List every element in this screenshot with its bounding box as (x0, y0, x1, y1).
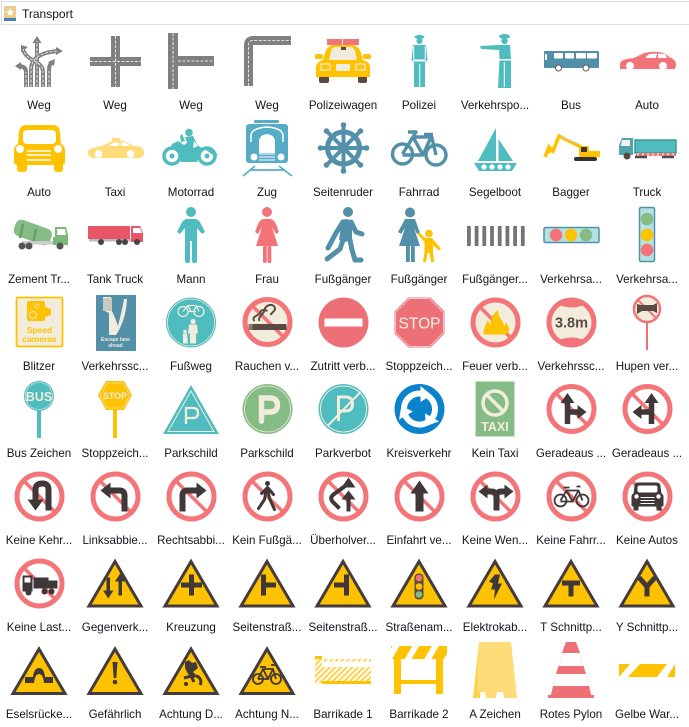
cell: Fußgängerüberweg (462, 226, 528, 286)
label: Fußgänger (315, 273, 371, 286)
label: Polizei (402, 99, 436, 112)
icon: no left or right (473, 474, 518, 519)
label: Stoppzeich... (81, 447, 149, 460)
label: Eselsrücke... (6, 708, 72, 721)
cell: Überholverbot (310, 474, 376, 547)
icon: yellow car (14, 125, 65, 172)
icon: parking circle (242, 384, 292, 434)
label: Barrikade 2 (389, 708, 449, 721)
label: Keine Last... (7, 621, 71, 634)
cell: Einfahrt verboten (386, 474, 452, 547)
icon: bicycle warning (241, 649, 293, 694)
label: Keine Wen... (462, 534, 528, 547)
cell: Seitenruder (313, 122, 373, 199)
icon: traffic light warning (393, 562, 445, 606)
icon: red traffic cone (548, 642, 594, 698)
label: Auto (27, 186, 51, 199)
label: Keine Fahrr... (536, 534, 606, 547)
cell: Fahrrad (392, 132, 446, 199)
cell: Kein Fußgänger (232, 474, 302, 547)
label: Parkschild (240, 447, 294, 460)
cell: Frau (255, 207, 279, 286)
cell: Fußgänger 2 (391, 208, 447, 286)
icon: no bicycles (549, 474, 594, 519)
icon: escape lane sign: ahead (108, 343, 123, 349)
label: Bus Zeichen (7, 447, 71, 460)
icon: taxi (88, 138, 144, 158)
label: Verkehrspo... (461, 99, 529, 112)
label: Achtung D... (159, 708, 223, 721)
cell: Elektrokabel (463, 562, 527, 634)
label: Hupen ver... (616, 360, 678, 373)
icon: no pedestrians (245, 474, 290, 519)
icon: horizontal traffic light (544, 228, 599, 242)
cell: T Schnittpunkt (540, 562, 602, 634)
label: Achtung N... (235, 708, 299, 721)
icon: vertical traffic light (640, 208, 654, 262)
icon: crosswalk (467, 226, 525, 246)
cell: Bagger (543, 136, 600, 199)
cell: Barrikade 1 (313, 656, 373, 721)
label: Zutritt verb... (310, 360, 376, 373)
label: Stoppzeich... (385, 360, 453, 373)
cell: Keine Autos (616, 474, 678, 547)
icon: road junction (15, 36, 63, 87)
icon: roundabout (394, 384, 447, 434)
label: Seitenstraß... (309, 621, 377, 634)
icon: stop sign: STOP (399, 316, 440, 332)
icon: red car (620, 52, 676, 70)
cell: Gegenverkehr (82, 562, 148, 634)
icon: speed bump warning (13, 649, 65, 694)
label: Rauchen v... (235, 360, 299, 373)
cell: Truck (619, 138, 676, 199)
icon: stencil (4, 6, 16, 21)
label: Auto (635, 99, 659, 112)
cell: Polizeiwagen (309, 39, 377, 112)
cell: Keine Wende (462, 474, 528, 547)
label: Kein Fußgä... (232, 534, 302, 547)
icon: escape lane sign (96, 295, 136, 351)
icon: road corner (248, 40, 291, 86)
icon: no right turn (169, 474, 214, 519)
cell: Verkehrspolizei (461, 34, 529, 112)
icon: tank truck (88, 226, 143, 245)
cell: Mann (176, 207, 206, 286)
label: Motorrad (168, 186, 214, 199)
cell: Stoppzeichen gelb (81, 381, 149, 460)
icon: T junction warning (545, 562, 597, 606)
icon: side road left warning (317, 562, 369, 606)
icon: excavator (543, 136, 600, 161)
icon: no straight (397, 474, 442, 519)
label: Straßenam... (385, 621, 453, 634)
icon: man (177, 207, 205, 263)
cell: Achtung Nicht-Kraftfahrzeuge (235, 649, 299, 721)
cell: Blitzer (16, 298, 62, 373)
label: Weg (27, 99, 51, 112)
icon: truck (619, 138, 676, 160)
label: Kreisverkehr (386, 447, 452, 460)
cell: Geradeaus links (612, 386, 682, 460)
icon: cement truck (12, 218, 68, 250)
label: Parkverbot (315, 447, 372, 460)
cell: Keine Fahrräder (536, 474, 606, 547)
label: Elektrokab... (463, 621, 527, 634)
icon: ship wheel (318, 122, 369, 174)
icon: no cars (625, 474, 670, 519)
label: Bagger (552, 186, 590, 199)
icon: bus stop sign: BUS (26, 390, 52, 404)
cell: Keine Kehrtwende (6, 474, 72, 547)
icon: no straight or right (549, 386, 594, 432)
icon: sailboat (474, 128, 517, 171)
label: Blitzer (23, 360, 55, 373)
cell: Eselsrücken (6, 649, 72, 721)
icon: police officer (412, 35, 428, 87)
cell: Verkehrsschild 3.8m (537, 298, 605, 373)
cell: Zutritt verboten (310, 298, 376, 373)
cell: Parkverbot (315, 384, 372, 460)
label: Zug (257, 186, 277, 199)
icon: bicycle (392, 132, 446, 165)
cell: Stoppzeichen (385, 298, 453, 373)
label: Geradeaus ... (536, 447, 606, 460)
cell: Auto rot (620, 52, 676, 112)
label: Fußweg (170, 360, 212, 373)
icon: motorcycle (164, 129, 218, 164)
label: Kreuzung (166, 621, 216, 634)
label: Polizeiwagen (309, 99, 377, 112)
icon: parking triangle (163, 385, 219, 434)
label: Weg (255, 99, 279, 112)
cell: Rauchen verboten (235, 300, 299, 373)
label: T Schnittp... (540, 621, 602, 634)
cell: Bus Zeichen (7, 381, 71, 460)
icon: speed camera sign: cameras (22, 334, 57, 344)
cell: Auto gelb (14, 125, 65, 199)
icon: Y junction warning (621, 562, 673, 606)
label: Verkehrsa... (616, 273, 678, 286)
label: Barrikade 1 (313, 708, 373, 721)
icon: speed camera sign: Speed (27, 325, 52, 335)
icon: no smoking (245, 300, 290, 344)
icon: crossroads warning (165, 562, 217, 606)
icon: speed camera sign (16, 298, 62, 346)
label: Keine Autos (616, 534, 678, 547)
icon: machinery warning (165, 649, 217, 694)
cell: Weg 1 (15, 36, 63, 112)
label: Taxi (105, 186, 125, 199)
label: Mann (176, 273, 206, 286)
label: Y Schnittp... (616, 621, 678, 634)
label: Geradeaus ... (612, 447, 682, 460)
icon: traffic police (480, 34, 511, 88)
cell: Polizei (402, 35, 436, 112)
cell: Verkehrsschild (81, 295, 149, 373)
cell: Verkehrsampel vertikal (616, 208, 678, 286)
label: Bus (561, 99, 581, 112)
icon: escape lane sign: Escape lane (101, 337, 130, 343)
icon: woman (255, 207, 279, 263)
cell: Rechtsabbiegen (157, 474, 225, 547)
cell: Rotes Pylon (540, 642, 602, 721)
icon: barricade one (315, 656, 371, 684)
icon: T road (168, 33, 214, 89)
cell: Gefährlich (89, 649, 141, 721)
icon: danger warning (89, 649, 141, 694)
label: Rechtsabbi... (157, 534, 225, 547)
label: Überholver... (310, 534, 376, 547)
cell: Straßenampel (385, 562, 453, 634)
label: Frau (255, 273, 279, 286)
label: Segelboot (469, 186, 522, 199)
cell: Motorrad (164, 129, 218, 199)
icon: no entry (318, 298, 368, 348)
label: Verkehrsa... (540, 273, 602, 286)
label: Gegenverk... (82, 621, 148, 634)
icon: no left turn (93, 474, 138, 519)
icon: no u-turn (17, 474, 62, 519)
icon: A-frame sign (473, 642, 517, 698)
cell: Kein Taxi (472, 382, 518, 460)
icon: police car (315, 39, 371, 83)
cell: Tank Truck (87, 226, 143, 286)
label: Parkschild (164, 447, 218, 460)
icon: yellow warning strip (619, 664, 675, 677)
label: Fußgänger... (462, 273, 528, 286)
cell: Y Schnittpunkt (616, 562, 678, 634)
cell: Zug (243, 120, 292, 199)
icon: bus (544, 51, 599, 71)
cell: Fußweg (166, 298, 216, 373)
label: Feuer verb... (462, 360, 528, 373)
icon: footpath sign (166, 298, 216, 348)
icon: no straight or left (625, 386, 670, 432)
cell: Weg 3 (168, 33, 214, 112)
label: Verkehrssc... (537, 360, 605, 373)
icon: crossroad (90, 36, 141, 87)
icon: two-way traffic warning (89, 562, 141, 606)
cell: Kreisverkehr (386, 384, 452, 460)
heading: Transport (22, 7, 74, 21)
cell: Verkehrsampel horizontal (540, 228, 602, 286)
cell: Parkschild Dreieck (163, 385, 219, 460)
cell: Segelboot (469, 128, 522, 199)
label: Weg (179, 99, 203, 112)
label: Fahrrad (399, 186, 439, 199)
cell: Bus (544, 51, 599, 112)
icon: no fire (473, 300, 518, 345)
icon: train (243, 120, 292, 176)
cell: Keine Lastwagen (7, 561, 71, 634)
cell: Weg 2 (90, 36, 141, 112)
label: Seitenruder (313, 186, 373, 199)
cell: Linksabbiegen (82, 474, 148, 547)
cell: Barrikade 2 (389, 646, 449, 721)
cell: Weg 4 (248, 40, 291, 112)
label: Truck (633, 186, 661, 199)
cell: Gelbe Warnung (615, 664, 679, 721)
cell: Geradeaus rechts (536, 386, 606, 460)
label: Rotes Pylon (540, 708, 602, 721)
cell: Fußgänger 1 (315, 207, 371, 286)
cell: Zement Truck (8, 218, 70, 286)
label: Fußgänger (391, 273, 447, 286)
cell: Feuer verboten (462, 300, 528, 373)
cell: Kreuzung (165, 562, 217, 634)
cell: Seitenstraße links (309, 562, 377, 634)
icon: woman and child (398, 208, 441, 262)
icon: height limit sign: 3.8m (555, 316, 588, 332)
icon: walking man (327, 207, 362, 260)
label: Weg (103, 99, 127, 112)
cell: Seitenstraße rechts (233, 562, 301, 634)
label: Gelbe War... (615, 708, 679, 721)
icon: no overtaking (321, 474, 366, 519)
label: Seitenstraß... (233, 621, 301, 634)
cell: A Zeichen (469, 642, 521, 721)
icon: barricade two (391, 646, 447, 694)
cell: Achtung Drehmaschine (159, 649, 223, 721)
icon: no parking (318, 384, 368, 434)
icon: electric warning (469, 562, 521, 606)
icon: side road right warning (241, 562, 293, 606)
label: Verkehrssc... (81, 360, 149, 373)
icon: no trucks (17, 561, 62, 606)
label: Einfahrt ve... (386, 534, 452, 547)
label: Kein Taxi (472, 447, 518, 460)
label: Zement Tr... (8, 273, 70, 286)
label: Gefährlich (89, 708, 141, 721)
label: A Zeichen (469, 708, 521, 721)
icon: no taxi sign: TAXI (481, 420, 509, 434)
icon: yellow stop sign: STOP (103, 391, 127, 401)
label: Keine Kehr... (6, 534, 72, 547)
title bar (2, 2, 689, 24)
cell: Hupen verboten (616, 296, 678, 373)
icon: no horn sign (634, 296, 660, 350)
label: Linksabbie... (82, 534, 148, 547)
cell: Parkschild Kreis (240, 384, 294, 460)
cell: Taxi (88, 138, 144, 199)
label: Tank Truck (87, 273, 143, 286)
